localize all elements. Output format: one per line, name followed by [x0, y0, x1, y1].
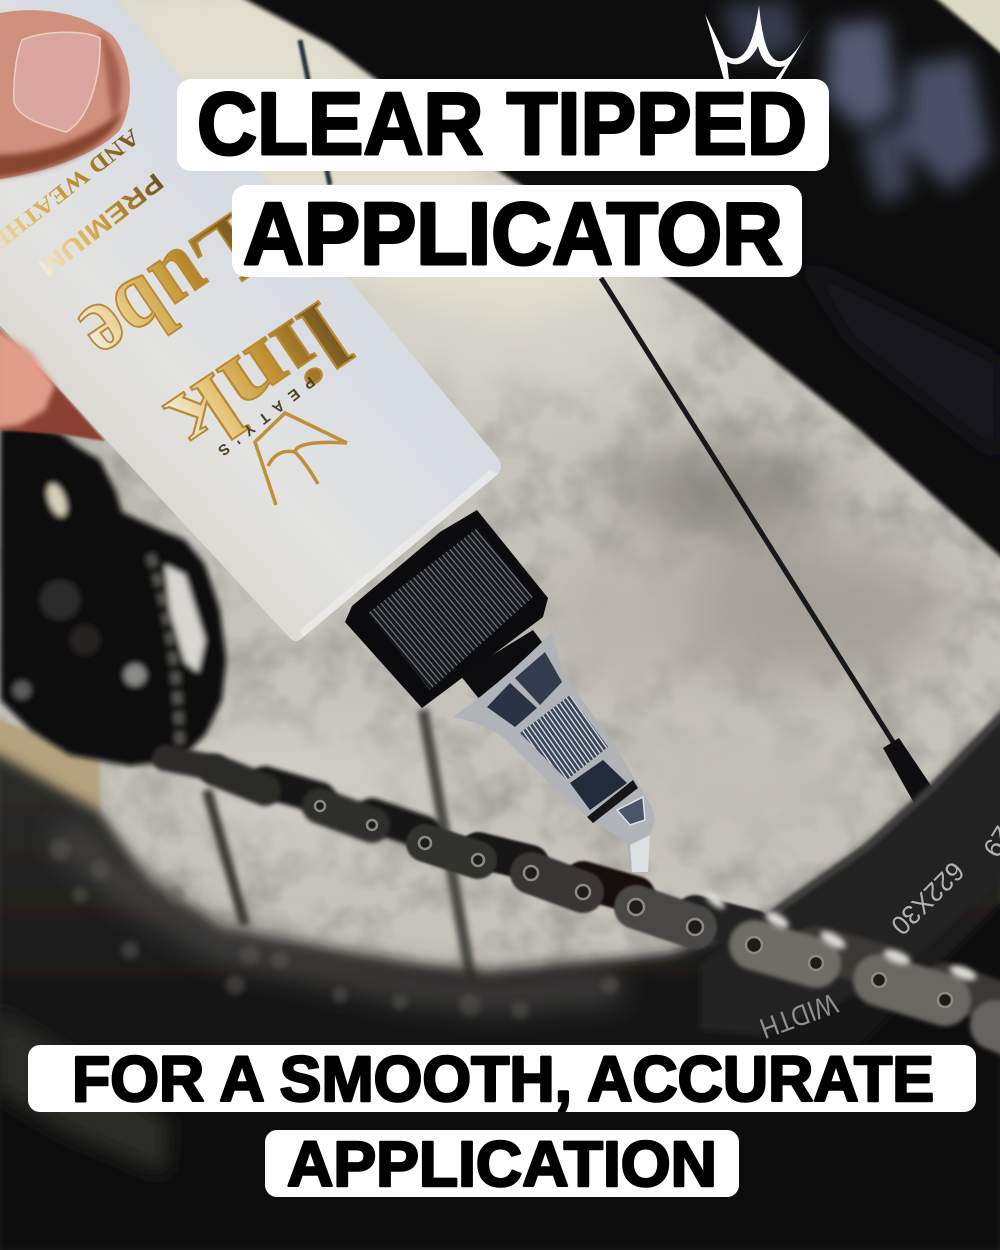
tyre sidewall lettering: 622X30 [885, 856, 970, 941]
thumbnail [14, 32, 100, 132]
label: premium: PREMIUM [33, 167, 169, 282]
outer plates [215, 770, 372, 825]
label: lube: Lube [63, 195, 280, 390]
label: peaty's: PEATY'S [215, 373, 318, 459]
upper tyre [228, 0, 1000, 565]
cap [345, 510, 548, 708]
inner links [165, 758, 425, 833]
caption: for a smooth, accurate: FOR A SMOOTH, ACCURATE [72, 1043, 934, 1115]
bottle [0, 0, 501, 641]
icon: peaty's crown on bottle [255, 413, 347, 505]
tyre sidewall lettering [755, 821, 1000, 1044]
hand [0, 10, 130, 441]
rear derailleur [0, 425, 226, 766]
caption: application: APPLICATION [287, 1128, 717, 1200]
chain highlights [703, 888, 978, 983]
blurred ground tones [170, 260, 950, 840]
spokes [207, 40, 934, 985]
pale corner [932, 0, 1000, 55]
pale background top [90, 0, 640, 320]
clear tip nozzle [453, 632, 655, 872]
rim [700, 712, 1000, 1035]
heading: clear tipped: CLEAR TIPPED [197, 74, 807, 173]
icon: peaty's crown logo [705, 5, 811, 80]
label: link: link [150, 283, 368, 478]
bike chain [165, 758, 1000, 1035]
grey streak lower left [0, 1010, 170, 1175]
lit haze along tyre edge [60, 830, 620, 995]
tan patch left [0, 715, 100, 815]
bokeh dots [49, 839, 619, 1019]
label: product text [0, 124, 368, 478]
tyre sidewall lettering: WIDTH [755, 986, 842, 1044]
thumb [0, 10, 130, 180]
lower tyre and rim [0, 712, 1000, 1250]
heading: applicator: APPLICATOR [243, 184, 783, 283]
lower finger [0, 325, 105, 441]
chain rivets [315, 801, 952, 1007]
